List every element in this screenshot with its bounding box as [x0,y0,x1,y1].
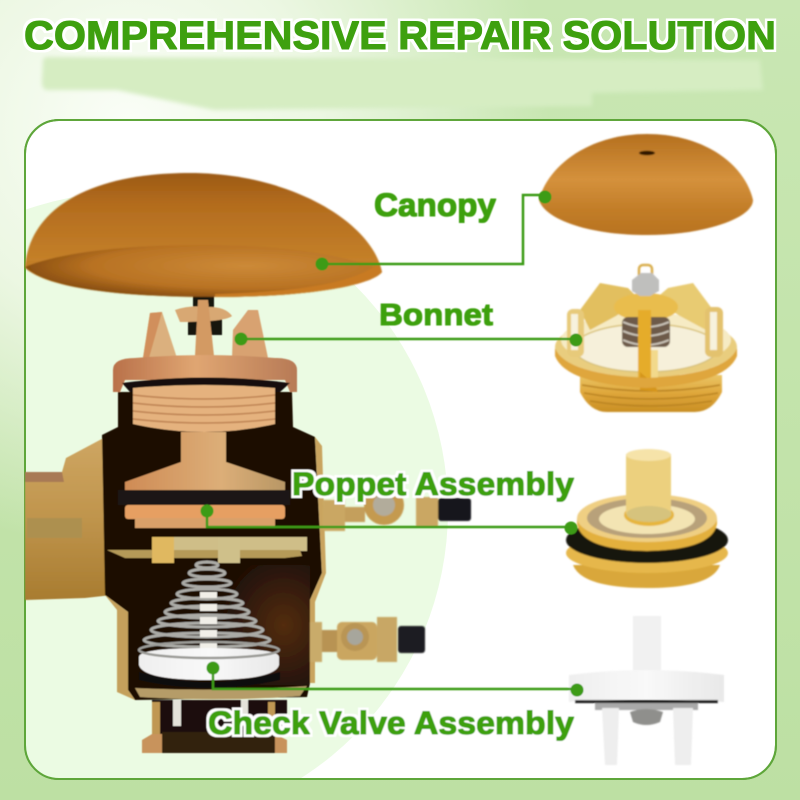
leader: bonnet [234,332,582,346]
upper test cock valve [323,485,471,531]
label: bonnet: Bonnet [379,297,493,332]
canopy part photo [539,134,753,235]
threads [133,385,275,432]
outlet base [152,700,287,736]
flange [113,355,297,392]
label: poppet assembly: Poppet Assembly [292,466,574,502]
spring [144,562,270,647]
poppet [125,432,285,490]
smudged box under title [42,57,763,110]
leader: canopy [316,190,552,270]
canopy, left dome [25,173,382,297]
check valve part photo [569,616,724,765]
poppet part photo [566,449,728,588]
title: COMPREHENSIVE REPAIR SOLUTION [24,14,776,58]
bonnet cage [107,288,307,753]
label: check valve assembly: Check Valve Assembly [208,705,574,741]
guide plate [152,537,307,551]
cutaway valve illustration [25,134,753,765]
label: canopy: Canopy [374,187,496,223]
bonnet part photo [555,265,737,412]
dark cavity [102,392,322,700]
check disc [139,648,279,680]
leader: check valve assembly [206,662,584,696]
lower test cock valve [310,617,425,662]
leader: poppet assembly [200,504,578,534]
inlet pipe and body shoulder [25,433,113,600]
